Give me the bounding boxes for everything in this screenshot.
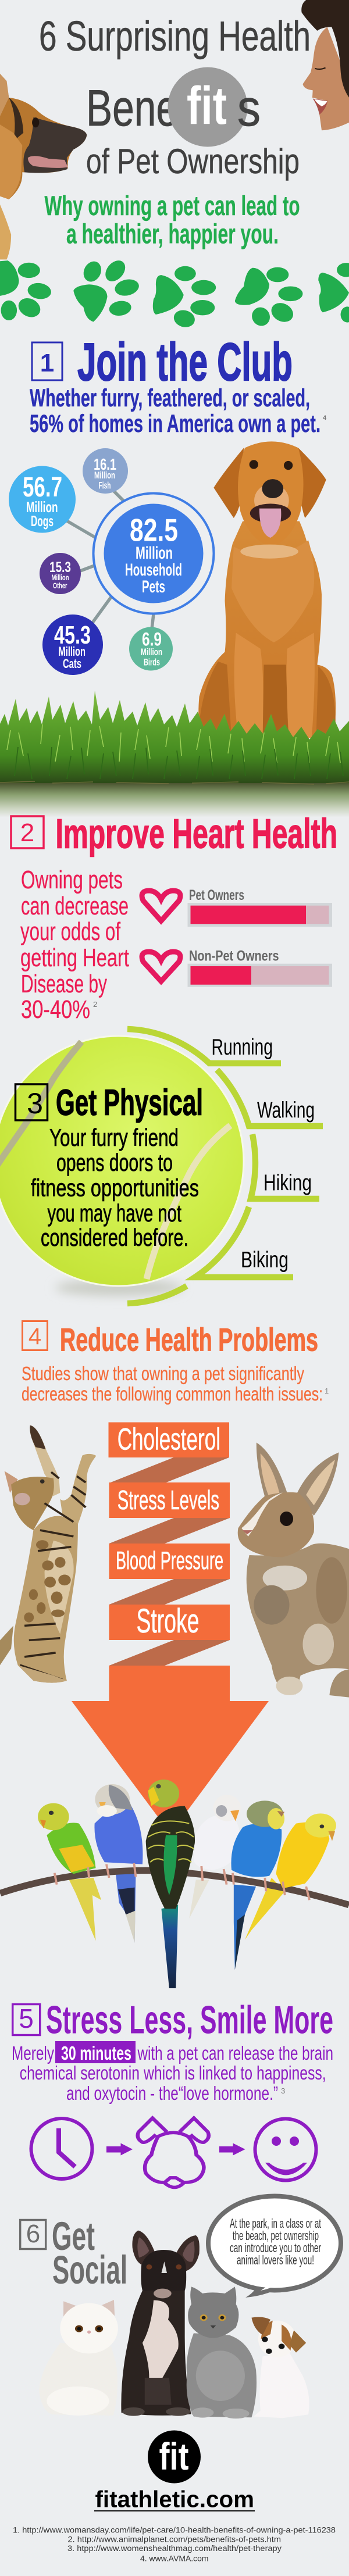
body text: Your furry friend (49, 1124, 179, 1151)
heading: Get Physical (56, 1082, 203, 1123)
body text: getting Heart (20, 944, 129, 972)
fit badge: fit (187, 76, 227, 135)
website: fitathletic.com (95, 2487, 254, 2513)
photo: french bulldog (121, 2231, 200, 2416)
references: 2. http://www.animalplanet.com/pets/benefits-of-pets.htm (67, 2535, 281, 2544)
fish bubble (83, 448, 128, 494)
body text (12, 2041, 333, 2104)
photo: grey kitten (187, 2286, 257, 2418)
number box 2: 2 (20, 819, 34, 847)
logo badge (148, 2430, 201, 2484)
total bubble: Pets (142, 577, 165, 596)
body text: opens doors to (56, 1149, 173, 1176)
bird 5 (231, 1800, 284, 1877)
number box 3 (15, 1084, 48, 1120)
icon: clock (31, 2118, 92, 2179)
panel: reduce health problems (0, 1321, 349, 1988)
photo: white persian cat (39, 2300, 118, 2416)
body text: fitness opportunities (31, 1174, 199, 1201)
photo: tennis ball (0, 1036, 244, 1286)
branch (0, 1870, 349, 1905)
number box 1: 1 (40, 349, 54, 377)
number box 1 (32, 342, 62, 380)
total bubble: Million (136, 544, 173, 563)
highlight: 30 minutes: 30 minutes (61, 2042, 131, 2064)
intro text: 4 (323, 415, 327, 421)
highlight: 30 minutes (55, 2041, 136, 2064)
header panel (0, 0, 349, 330)
arc: hiking (251, 1134, 319, 1199)
body text: your odds of (20, 917, 121, 946)
references: 1. http://www.womansday.com/life/pet-care/10-health-benefits-of-owning-a-pet-116238 (13, 2525, 336, 2535)
photo: bengal kitten (0, 1425, 96, 1683)
bird 3 centre (146, 1780, 195, 1988)
body text: Owning pets (21, 866, 123, 894)
photo: budgerigars on branch (0, 1780, 349, 1988)
label: blood pressure (109, 1544, 230, 1579)
arc: bottom (127, 1286, 187, 1303)
dogs bubble: Dogs (31, 512, 54, 530)
body text: Merely (12, 2042, 54, 2064)
heading (52, 2214, 127, 2292)
number box 6 (20, 2220, 46, 2249)
arc: biking (195, 1207, 293, 1277)
bird 6 (276, 1813, 336, 1888)
other bubble: Other (53, 581, 67, 590)
panel: get physical (0, 1029, 323, 1303)
photo: laughing woman (301, 0, 349, 130)
body text: 2 (93, 1000, 97, 1009)
intro text (22, 1363, 329, 1405)
label: cholesterol: Cholesterol (117, 1422, 220, 1457)
intro text (30, 384, 327, 438)
birds bubble: Birds (144, 657, 160, 667)
body text: can decrease (21, 892, 129, 920)
title: Bene (86, 79, 178, 137)
label: stress levels: Stress Levels (117, 1485, 219, 1515)
label: stress levels (109, 1482, 230, 1518)
body text: 30-40% (21, 995, 90, 1024)
photo: rabbit (238, 1442, 349, 1698)
photo: golden retriever (198, 441, 336, 738)
body text: 3 (281, 2086, 285, 2095)
bar: pet owners: Pet Owners (189, 887, 244, 903)
birds bubble: 6.9 (142, 629, 162, 650)
footer (13, 2430, 336, 2563)
panel: stress less (12, 1998, 333, 2187)
title: s (237, 79, 261, 137)
photo: grass (0, 691, 349, 817)
activity labels: Running (212, 1035, 273, 1060)
body text: and oxytocin - the“love hormone.” (66, 2082, 278, 2104)
icon: dog face (138, 2118, 209, 2187)
activity arcs (127, 1029, 323, 1303)
other bubble: 15.3 (49, 559, 71, 576)
heart icon: pet owners (142, 891, 180, 921)
arc: running (127, 1029, 281, 1063)
number box 2 (11, 816, 44, 848)
other bubble: Million (51, 573, 69, 582)
panel: improve heart health (11, 812, 337, 1024)
body text: Disease by (21, 970, 107, 998)
icon: smiley (255, 2118, 316, 2180)
heading: Social (52, 2248, 127, 2292)
number box 4: 4 (29, 1324, 41, 1349)
ribbon arrow (72, 1422, 269, 1834)
total bubble: Household (125, 560, 182, 580)
arrow shape (72, 1666, 269, 1834)
bubble chart (9, 448, 214, 675)
title (39, 13, 311, 181)
dogs bubble: 56.7 (23, 472, 62, 503)
photo: chihuahua puppy (251, 2317, 309, 2418)
photo: german shepherd (0, 74, 87, 259)
arrow: dog to smile (219, 2143, 245, 2156)
dogs bubble: Million (26, 498, 58, 516)
intro text: 1 (325, 1387, 329, 1395)
logo badge: fit (159, 2435, 189, 2478)
birds bubble (129, 627, 173, 671)
label: stroke: Stroke (136, 1602, 199, 1640)
bird 1 (38, 1803, 96, 1874)
body text: you may have not (48, 1199, 181, 1227)
fish bubble: Million (94, 470, 115, 481)
number box 5 (13, 2003, 40, 2035)
label: blood pressure: Blood Pressure (116, 1546, 223, 1575)
body text: considered before. (41, 1224, 188, 1251)
title: of Pet Ownership (86, 142, 300, 181)
body text (20, 866, 129, 1024)
arc: walking (217, 1070, 323, 1126)
body text (31, 1124, 199, 1251)
fish bubble: Fish (99, 480, 111, 491)
other bubble (40, 553, 81, 594)
number box 5: 5 (19, 2003, 34, 2034)
bird 2 (94, 1784, 143, 1864)
number box 3: 3 (27, 1087, 43, 1120)
total bubble: 82.5 (130, 512, 178, 548)
references (13, 2525, 336, 2563)
dogs bubble (9, 466, 76, 533)
subtitle (44, 190, 300, 249)
activity labels: Hiking (263, 1171, 312, 1195)
fit badge (168, 67, 248, 147)
ball shadow (55, 1280, 183, 1296)
panel: get social (20, 2196, 341, 2418)
references: 3. htpp://www.womenshealthmag.com/health/pet-therapy (67, 2544, 282, 2553)
bird feet (55, 1863, 309, 1900)
heart icon: non-pet owners (142, 952, 180, 981)
references: 4. www.AVMA.com (140, 2554, 208, 2563)
bird tails (69, 1874, 285, 1970)
arrow: clock to dog (106, 2143, 133, 2156)
cats bubble: Cats (63, 656, 81, 671)
fish bubble: 16.1 (94, 455, 116, 473)
bird 4 (194, 1795, 241, 1870)
number box 6: 6 (26, 2220, 40, 2248)
label: cholesterol (108, 1422, 229, 1457)
activity labels: Biking (241, 1248, 289, 1273)
total bubble (93, 493, 214, 614)
birds bubble: Million (141, 646, 162, 658)
activity labels (212, 1035, 315, 1273)
bar: pet owners (187, 887, 332, 927)
paw prints (0, 257, 349, 330)
number box 4 (22, 1321, 48, 1350)
cats bubble: 45.3 (54, 621, 91, 649)
bar: non-pet owners: Non-Pet Owners (189, 948, 279, 964)
speech bubble (208, 2196, 341, 2298)
bar: non-pet owners (187, 948, 332, 987)
cats bubble (42, 614, 103, 675)
panel: join the club (0, 333, 349, 817)
activity labels: Walking (257, 1098, 315, 1123)
heading: Get (52, 2214, 95, 2259)
cats bubble: Million (58, 644, 86, 659)
